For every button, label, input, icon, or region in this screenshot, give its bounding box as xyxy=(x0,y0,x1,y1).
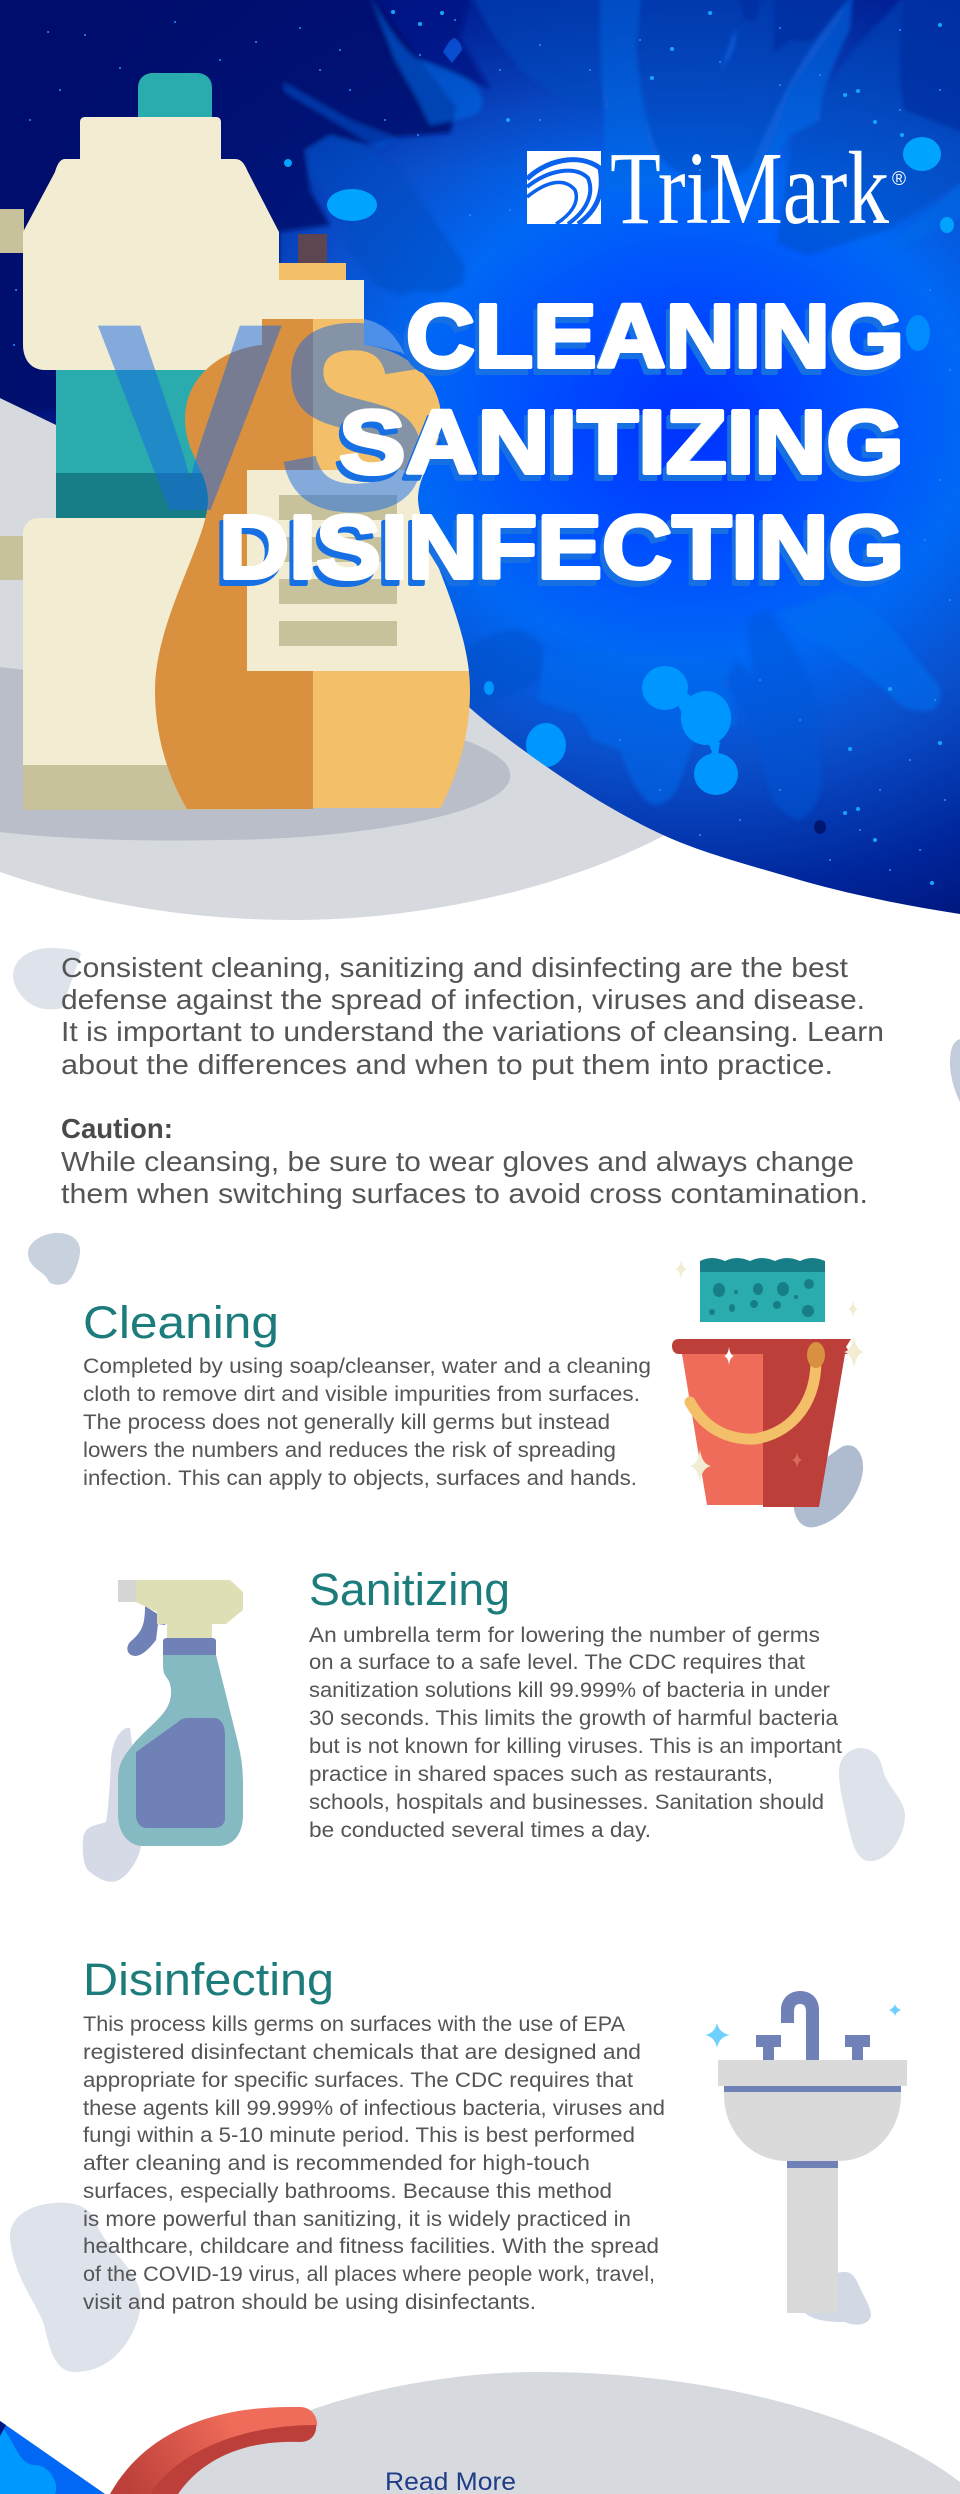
bottle cap xyxy=(298,234,327,263)
caution text xyxy=(61,1113,868,1209)
body: cleaning: Completed by using soap/cleanser, water and a cleaning xyxy=(83,1355,651,1378)
intro text: defense against the spread of infection, viruses and disease. xyxy=(61,984,865,1015)
decorative blob: intro left xyxy=(13,948,81,1009)
navy pockets xyxy=(372,0,960,133)
pipe dark side xyxy=(150,2425,316,2494)
jug cap xyxy=(138,73,212,117)
body: disinfecting: healthcare, childcare and fitness facilities. With the spread xyxy=(83,2235,659,2258)
panel: sanitizing xyxy=(83,1564,905,1882)
right tap xyxy=(845,2035,870,2060)
blob behind bucket xyxy=(794,1445,863,1527)
label bars xyxy=(279,495,397,646)
body: cleaning: lowers the numbers and reduces the risk of spreading xyxy=(83,1439,616,1462)
bright stars xyxy=(393,12,940,883)
body: disinfecting: fungi within a 5-10 minute period. This is best performed xyxy=(83,2124,635,2147)
body: sanitizing: 30 seconds. This limits the growth of harmful bacteria xyxy=(309,1707,838,1730)
footer blue corner xyxy=(0,2421,105,2494)
basin xyxy=(724,2092,901,2161)
body: cleaning: infection. This can apply to objects, surfaces and hands. xyxy=(83,1467,637,1490)
icon: sponge and bucket xyxy=(672,1258,864,1527)
soft splash shapes xyxy=(0,0,960,820)
registered mark: ® xyxy=(892,169,906,190)
bucket body right xyxy=(763,1354,845,1507)
body: sanitizing: but is not known for killing viruses. This is an important xyxy=(309,1735,842,1758)
VS overlay letters: V xyxy=(96,268,285,568)
sparkle large xyxy=(705,2023,730,2048)
body: disinfecting: registered disinfectant chemicals that are designed and xyxy=(83,2041,641,2064)
body: disinfecting: these agents kill 99.999% of infectious bacteria, viruses and xyxy=(83,2097,665,2120)
intro text xyxy=(61,952,884,1080)
icon: sink xyxy=(705,1991,907,2325)
blob behind spray bottle xyxy=(83,1728,143,1882)
caution text: While cleansing, be sure to wear gloves and always change xyxy=(61,1146,854,1177)
body: disinfecting: This process kills germs on surfaces with the use of EPA xyxy=(83,2013,625,2036)
body: sanitizing: on a surface to a safe level. The CDC requires that xyxy=(309,1651,805,1674)
logo xyxy=(527,131,906,246)
blob behind pedestal xyxy=(805,2272,871,2325)
intro text: about the differences and when to put them into practice. xyxy=(61,1049,833,1080)
body: cleaning: The process does not generally kill germs but instead xyxy=(83,1411,610,1434)
droplet shard xyxy=(443,38,462,63)
side handle bottom xyxy=(0,536,24,580)
body: disinfecting: surfaces, especially bathrooms. Because this method xyxy=(83,2180,612,2203)
sink top slab xyxy=(718,2060,907,2086)
body: disinfecting: after cleaning and is recommended for high-touch xyxy=(83,2152,590,2175)
top darkening band xyxy=(460,0,902,134)
jug neck xyxy=(80,117,221,159)
basin strip xyxy=(724,2086,901,2092)
title: SANITIZING xyxy=(339,393,904,493)
sparkle small xyxy=(889,2004,901,2016)
heading: sanitizing: Sanitizing xyxy=(309,1564,510,1615)
hero blue splash background xyxy=(0,0,960,920)
thin streak left xyxy=(283,82,395,150)
heading: cleaning: Cleaning xyxy=(83,1297,279,1348)
heading: disinfecting: Disinfecting xyxy=(83,1954,334,2005)
body: disinfecting: appropriate for specific surfaces. The CDC requires that xyxy=(83,2069,633,2092)
footer gray mound xyxy=(170,2372,960,2494)
body: disinfecting: of the COVID-19 virus, all places where people work, travel, xyxy=(83,2263,655,2286)
spray bottle body xyxy=(118,1655,243,1846)
spray trigger xyxy=(127,1606,167,1656)
body: sanitizing: sanitization solutions kill 99.999% of bacteria in under xyxy=(309,1679,830,1702)
body: disinfecting: visit and patron should be using disinfectants. xyxy=(83,2291,536,2314)
VS overlay letters: S xyxy=(277,268,431,567)
caution text: them when switching surfaces to avoid cross contamination. xyxy=(61,1178,868,1209)
sponge xyxy=(700,1258,825,1322)
body: disinfecting: is more powerful than sanitizing, it is widely practiced in xyxy=(83,2208,631,2231)
bucket handle xyxy=(690,1360,816,1439)
spray collar xyxy=(163,1638,216,1655)
mid blue blobs xyxy=(305,0,960,295)
hero gray ground shape xyxy=(0,398,700,920)
title: DISINFECTING xyxy=(219,498,904,598)
bucket knob xyxy=(807,1342,825,1368)
body: cleaning xyxy=(83,1355,651,1490)
pedestal xyxy=(787,2168,838,2313)
cast shadow under bottles xyxy=(0,667,510,841)
decorative blob: left of disinfecting xyxy=(10,2203,141,2372)
bottle body xyxy=(155,319,470,809)
sparkles xyxy=(675,1259,864,1482)
footer red pipe xyxy=(110,2407,317,2494)
intro text: It is important to understand the variations of cleansing. Learn xyxy=(61,1016,884,1047)
icon: spray bottle xyxy=(83,1580,243,1882)
bucket rim xyxy=(672,1339,851,1354)
body: cleaning: cloth to remove dirt and visible impurities from surfaces. xyxy=(83,1383,640,1406)
bottle collar xyxy=(279,263,346,280)
side handle top xyxy=(0,209,24,253)
spray liquid xyxy=(136,1718,225,1828)
body: sanitizing: be conducted several times a day. xyxy=(309,1819,651,1842)
body: sanitizing: An umbrella term for lowering the number of germs xyxy=(309,1624,820,1647)
panel: disinfecting xyxy=(83,1954,907,2325)
dark speck xyxy=(814,820,826,834)
light splash streaks xyxy=(370,0,960,250)
faucet xyxy=(781,1991,819,2060)
jug teal band xyxy=(56,370,256,473)
faint stars xyxy=(14,20,950,870)
body: sanitizing xyxy=(309,1624,842,1842)
jug lower body xyxy=(23,518,260,765)
navy upper left area xyxy=(0,0,457,410)
cyan droplets xyxy=(284,137,954,795)
body: sanitizing: practice in shared spaces such as restaurants, xyxy=(309,1763,773,1786)
S highlight over blue xyxy=(364,319,405,355)
orange bottle xyxy=(155,234,470,809)
jug upper body xyxy=(23,159,364,420)
VS overlay letters xyxy=(96,268,431,568)
left tap xyxy=(756,2035,781,2060)
body: disinfecting xyxy=(83,2013,665,2314)
pipe light side xyxy=(110,2407,317,2494)
panel: cleaning xyxy=(83,1258,864,1527)
pedestal strip xyxy=(787,2161,838,2168)
decorative blob: above cleaning xyxy=(28,1233,80,1285)
jug tan base xyxy=(23,765,263,810)
spray nozzle xyxy=(118,1580,136,1602)
caution text: Caution: xyxy=(61,1113,173,1144)
jug dark teal band xyxy=(56,473,256,518)
logo mark xyxy=(527,151,601,224)
large cleaner jug xyxy=(0,73,364,810)
spray head xyxy=(136,1580,243,1638)
decorative blob: right of sanitizing xyxy=(839,1748,905,1861)
title: CLEANING xyxy=(406,287,904,387)
bucket body left xyxy=(682,1354,763,1505)
lower splash fingers xyxy=(537,650,737,805)
logo wordmark: TriMark xyxy=(610,131,889,246)
title xyxy=(219,287,904,598)
decorative blob: right edge xyxy=(950,1039,960,1102)
body: sanitizing: schools, hospitals and businesses. Sanitation should xyxy=(309,1791,824,1814)
intro text: Consistent cleaning, sanitizing and disinfecting are the best xyxy=(61,952,848,983)
lower dark blob xyxy=(466,630,544,692)
